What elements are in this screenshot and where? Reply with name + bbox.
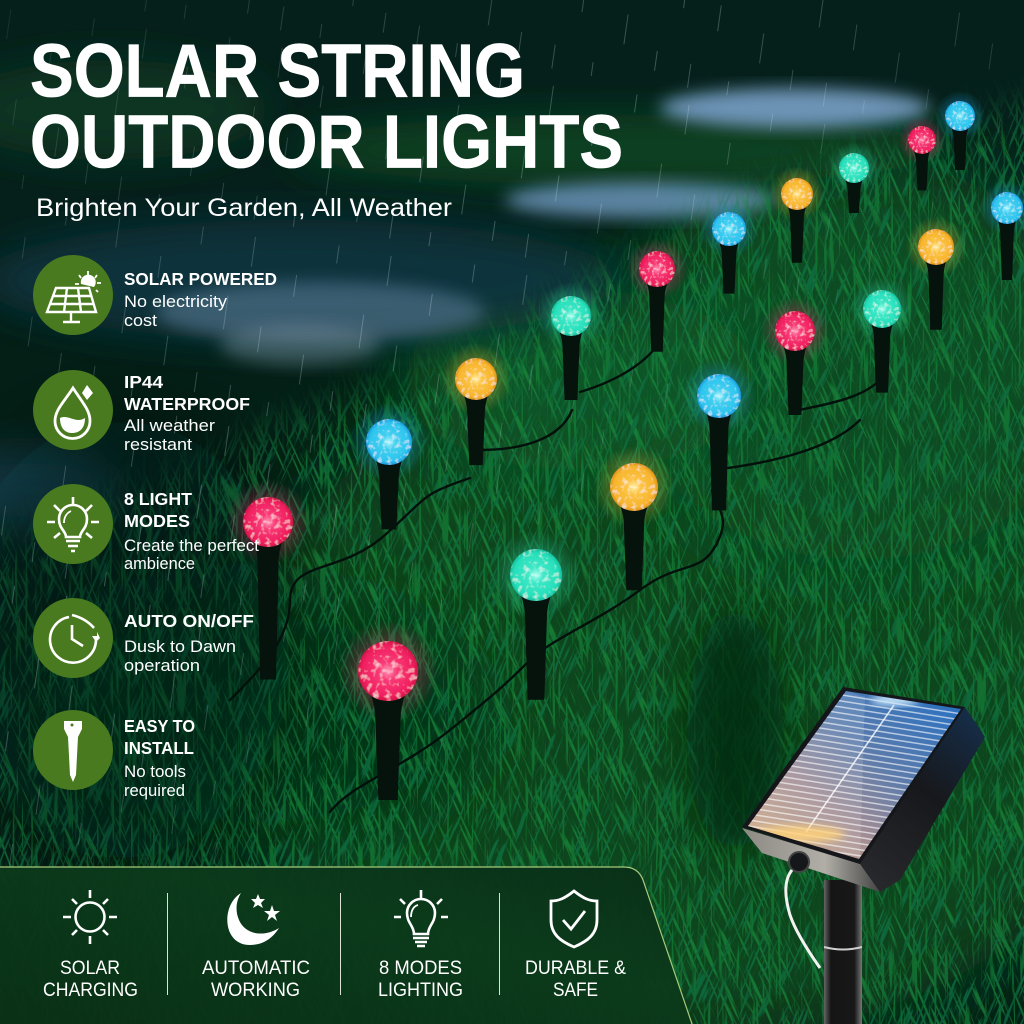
text: easy to install: EASY TO [124,716,195,736]
text: easy to install: No tools [124,763,186,781]
text: light modes: ambience [124,555,195,573]
text: auto on/off: AUTO ON/OFF [124,611,254,631]
text: solar powered: SOLAR POWERED [124,269,277,289]
panel: bottom benefits bar [0,867,692,1024]
text: light modes: MODES [124,511,190,531]
subtitle: Brighten Your Garden, All Weather [36,194,452,222]
light: teal near [492,531,580,700]
wires connecting the lights [230,340,880,812]
light: pink left [226,480,310,680]
text: waterproof: resistant [124,436,192,454]
icon: bulb [394,890,448,946]
light: blue left [350,403,428,529]
text: solar powered [124,269,277,330]
text: easy to install: required [124,782,185,800]
light: blue centre [682,359,756,510]
light: pink right mid [761,297,829,415]
benefit: 8 modes lighting [378,890,463,1001]
icon: water drop [33,370,113,450]
text: waterproof: All weather [124,417,216,435]
icon: solar panel [33,255,113,335]
benefit: durable and safe: DURABLE & [525,958,626,979]
icon: shield [551,891,597,947]
feature: auto on/off [33,598,254,678]
text: light modes [124,489,259,573]
light: pink mid far [626,238,688,352]
light: teal right [850,277,914,393]
text: light modes: Create the perfect [124,537,259,555]
light: yellow far [770,167,824,263]
text: auto on/off [124,611,254,675]
title: SOLAR STRING [30,28,525,112]
icon: sun [63,890,117,944]
light: pink far [898,116,946,190]
text: waterproof: IP44 [124,372,163,392]
feature: light modes [33,484,259,573]
icon: ground stake [33,710,113,790]
light: blue far [934,90,986,170]
benefit: 8 modes lighting: LIGHTING [378,980,463,1001]
benefit: durable and safe [525,891,626,1001]
text: solar powered: cost [124,312,157,330]
light: teal mid [537,282,605,400]
title [30,28,623,184]
solar panel on stake [740,680,985,1024]
text: light modes: 8 LIGHT [124,489,192,509]
light: pink nearest [337,620,439,800]
text: auto on/off: Dusk to Dawn [124,638,236,656]
light: blue right edge [980,181,1024,280]
light: blue mid far [700,200,758,294]
text: solar powered: No electricity [124,293,228,311]
benefit: automatic working: AUTOMATIC [202,958,310,979]
feature: waterproof [33,370,250,454]
light: yellow near [593,446,675,590]
icon: clock [33,598,113,678]
benefit: 8 modes lighting: 8 MODES [379,958,462,979]
benefit: solar charging [43,890,138,1001]
title: OUTDOOR LIGHTS [30,100,623,184]
light: teal far [828,142,880,213]
benefit: durable and safe: SAFE [553,980,598,1001]
benefit: solar charging: SOLAR [60,958,120,979]
icon: moon and stars [227,893,280,945]
text: easy to install: INSTALL [124,738,194,758]
icon: bulb [33,484,113,564]
feature: solar powered [33,255,277,335]
light: yellow right [905,216,967,330]
text: easy to install [124,716,195,800]
text: waterproof: WATERPROOF [124,394,250,414]
benefit: solar charging: CHARGING [43,980,138,1001]
text: auto on/off: operation [124,657,200,675]
light: yellow mid [440,343,512,465]
feature: easy to install [33,710,195,800]
benefit: automatic working [202,893,310,1001]
benefit: automatic working: WORKING [211,980,300,1001]
text: waterproof [124,372,250,454]
